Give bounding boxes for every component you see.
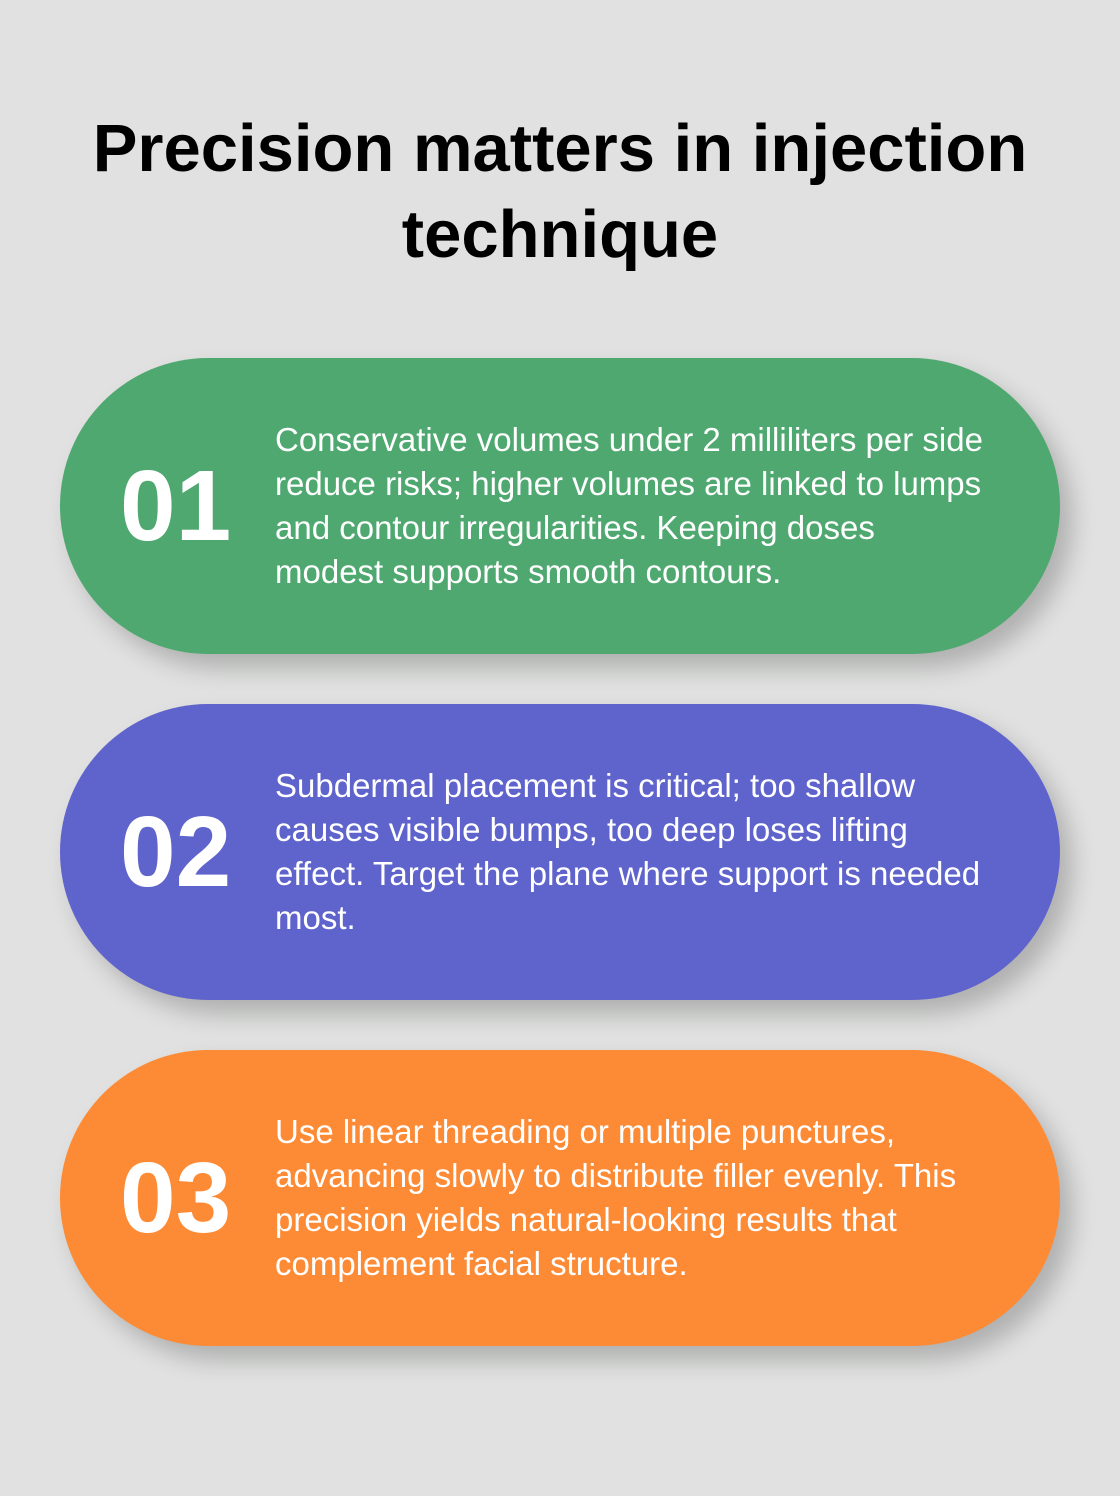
- text 01: Conservative volumes under 2 milliliters per side: [275, 421, 983, 458]
- title: Precision matters in injection: [93, 111, 1027, 186]
- text 01: [275, 421, 983, 590]
- text 03: precision yields natural-looking results that: [275, 1201, 897, 1238]
- panel: step 01: [60, 358, 1060, 654]
- title: [93, 111, 1027, 272]
- text 03: advancing slowly to distribute filler evenly. This: [275, 1157, 956, 1194]
- number 03: 03: [120, 1142, 231, 1254]
- text 01: and contour irregularities. Keeping doses: [275, 509, 875, 546]
- text 01: reduce risks; higher volumes are linked to lumps: [275, 465, 981, 502]
- text 02: causes visible bumps, too deep loses lifting: [275, 811, 908, 848]
- number 02: 02: [120, 796, 231, 908]
- panel: step 02: [60, 704, 1060, 1000]
- text 03: complement facial structure.: [275, 1245, 688, 1282]
- text 02: Subdermal placement is critical; too shallow: [275, 767, 915, 804]
- text 02: [275, 767, 980, 936]
- text 02: effect. Target the plane where support is needed: [275, 855, 980, 892]
- title: technique: [402, 197, 718, 272]
- text 03: [275, 1113, 956, 1282]
- text 02: most.: [275, 899, 356, 936]
- panel: step 03: [60, 1050, 1060, 1346]
- text 03: Use linear threading or multiple punctures,: [275, 1113, 895, 1150]
- text 01: modest supports smooth contours.: [275, 553, 781, 590]
- number 01: 01: [120, 450, 231, 562]
